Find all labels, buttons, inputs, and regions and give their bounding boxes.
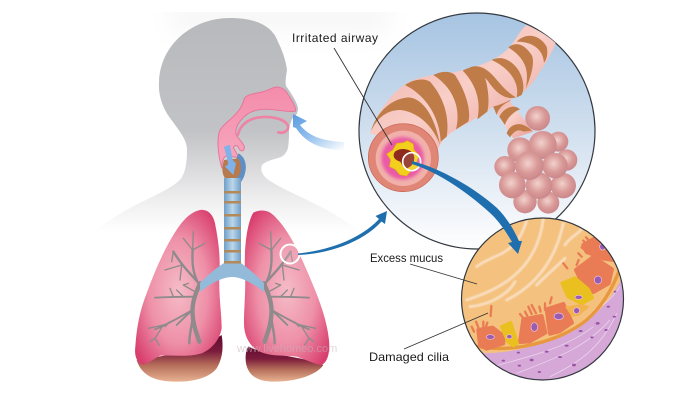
left lung	[135, 210, 223, 382]
label: excess mucus: Excess mucus	[370, 251, 443, 265]
highlight ring on lung	[280, 244, 300, 264]
watermark: www.livehomeo.com	[236, 343, 337, 355]
nasal and throat airway	[218, 87, 296, 168]
inhaled air arrow	[293, 114, 344, 150]
connective tissue	[483, 280, 623, 380]
airway opening	[368, 124, 438, 192]
right lung	[244, 211, 329, 382]
magnified airway panel	[359, 13, 595, 249]
cells	[478, 237, 613, 349]
illustration: smoking-damaged airways	[117, 12, 624, 382]
mucus swirls	[467, 218, 582, 307]
human silhouette	[82, 18, 372, 244]
goblet cells	[502, 278, 592, 346]
label: damaged cilia	[369, 313, 488, 364]
label: damaged cilia: Damaged cilia	[369, 350, 449, 364]
arrow: airway to tissue	[412, 161, 522, 254]
bronchial tube	[370, 25, 556, 152]
right bronchial tree	[259, 232, 316, 345]
top background haze	[170, 6, 390, 44]
larynx	[222, 145, 246, 187]
highlight ring	[403, 153, 421, 171]
nuclei	[486, 243, 606, 339]
arrow: lung to airway	[298, 211, 387, 255]
damaged cilia	[472, 237, 590, 332]
trachea and bronchi	[200, 178, 264, 292]
left bronchial tree	[148, 232, 205, 345]
basement membrane	[470, 268, 620, 348]
label: excess mucus	[370, 251, 477, 284]
alveoli cluster	[494, 106, 577, 214]
label: irritated airway	[292, 31, 392, 145]
magnified tissue panel	[462, 218, 630, 383]
label: irritated airway: Irritated airway	[292, 31, 378, 45]
